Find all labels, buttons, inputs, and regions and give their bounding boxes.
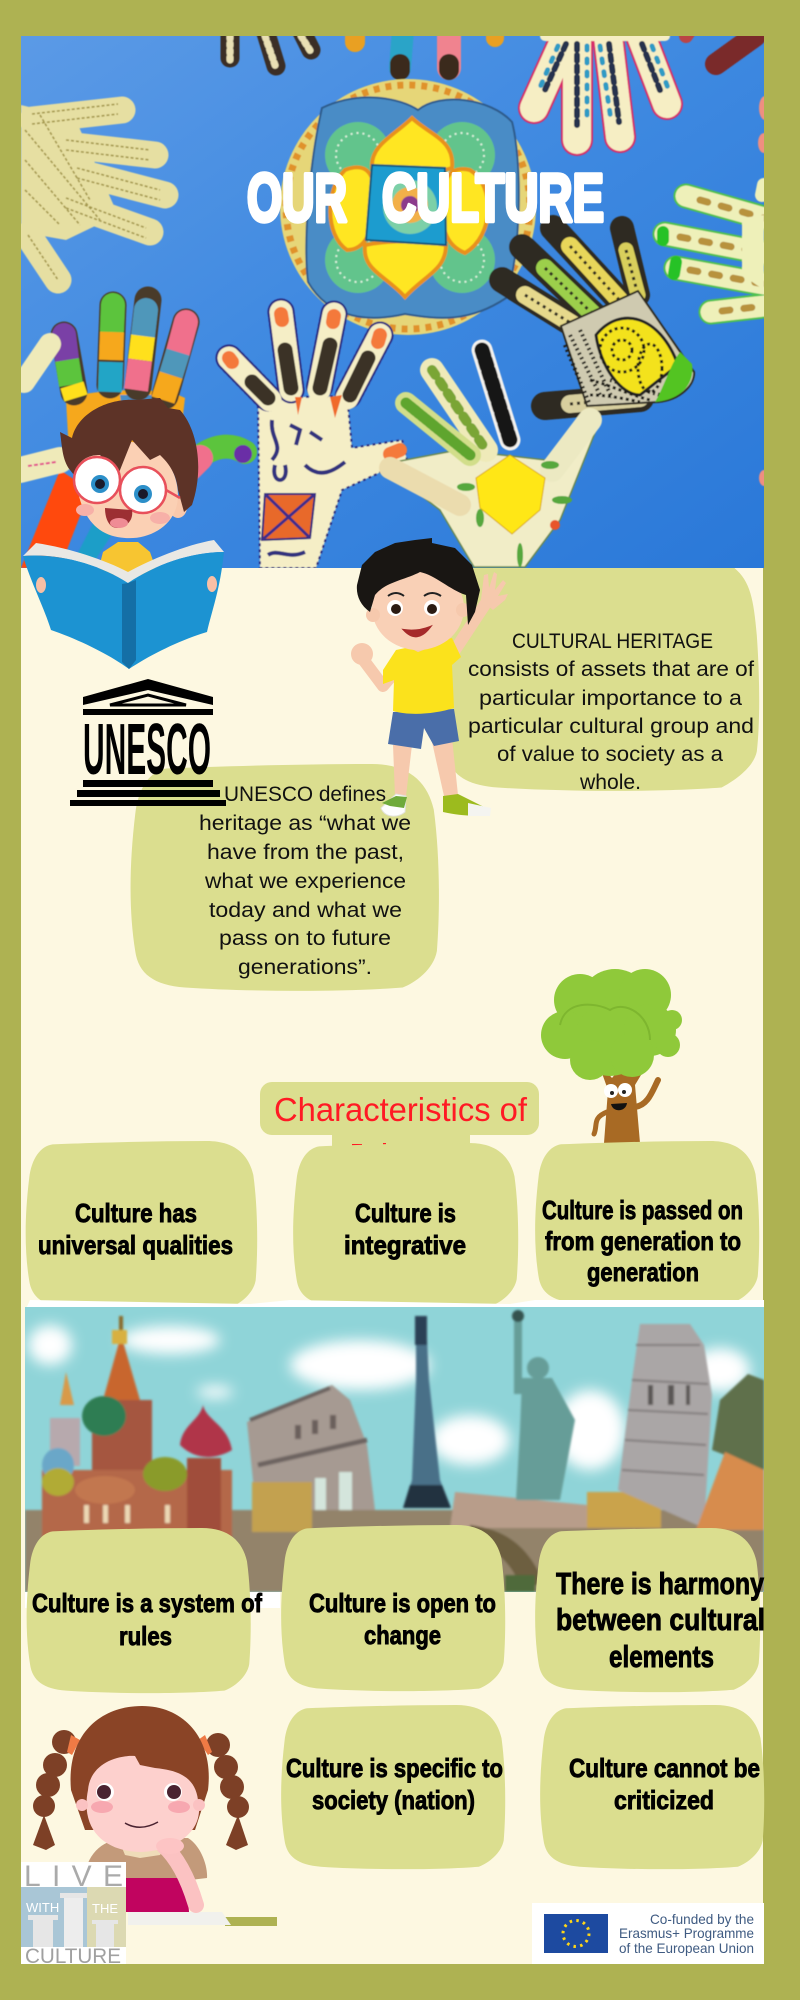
- braids: [33, 1730, 249, 1850]
- logo columns: [28, 1893, 118, 1947]
- logo: UNESCO temple: [70, 679, 226, 806]
- text: unesco definition: UNESCO defines: [224, 783, 386, 806]
- card: integrative: Culture is: [355, 1198, 456, 1228]
- legs: [393, 745, 412, 796]
- yellow building: [587, 1492, 661, 1528]
- photo: world monuments: [25, 1300, 764, 1608]
- logo: EU co-funded: [532, 1903, 764, 1964]
- card: unesco definition: [131, 764, 439, 991]
- orange pyramid: [696, 1452, 764, 1530]
- EU text: [619, 1911, 754, 1956]
- shorts: [388, 709, 459, 749]
- foreground ground band: [25, 1510, 764, 1592]
- mandala: [280, 79, 536, 335]
- character: tree: [541, 969, 682, 1143]
- eyes and mouth: [387, 593, 441, 636]
- boy hair: [60, 398, 198, 512]
- text: cultural heritage: whole.: [579, 771, 641, 794]
- text: unesco definition: [199, 783, 411, 979]
- title: OUR: [247, 160, 347, 236]
- arm: [163, 1845, 196, 1905]
- tree arms: [635, 1080, 658, 1107]
- card: specific to society: [281, 1705, 505, 1869]
- text: unesco definition: today and what we: [209, 899, 402, 922]
- hand: green right edge: [663, 185, 764, 312]
- card: universal qualities: [26, 1141, 257, 1310]
- open blue book: [23, 552, 224, 669]
- hand: colourful left: [20, 300, 252, 568]
- logo word CULTURE: CULTURE: [25, 1945, 121, 1968]
- yellow shirt: [383, 638, 461, 714]
- logo: live with the culture: [21, 1860, 126, 1968]
- card: passed on: generation: [587, 1257, 699, 1287]
- card: specific to society: Culture is specific to: [286, 1753, 503, 1783]
- eyes and cheeks: [91, 1783, 190, 1827]
- hero photo: painted hands on blue: [20, 28, 771, 568]
- card: system of rules: Culture is a system of: [32, 1588, 262, 1618]
- card: open to change: change: [364, 1620, 441, 1650]
- card: integrative: [293, 1143, 518, 1308]
- card: universal qualities: universal qualities: [38, 1230, 233, 1260]
- ancient wall: [450, 1492, 587, 1528]
- heading: characteristics of culture: [260, 1082, 539, 1160]
- hair back: [71, 1706, 209, 1830]
- character: boy waving in yellow shirt: [351, 538, 508, 816]
- statue of liberty: [512, 1310, 575, 1500]
- hand: yellow web: [388, 350, 600, 567]
- rocky mountain: [712, 1374, 764, 1470]
- hand: cream pattern left: [21, 104, 165, 280]
- text: cultural heritage: of value to society as a: [497, 743, 723, 766]
- boy glasses: [74, 457, 180, 513]
- card: open to change: Culture is open to: [309, 1588, 496, 1618]
- shoes: [381, 794, 406, 816]
- neck and face: [406, 630, 434, 652]
- text: cultural heritage: particular importance to a: [479, 687, 742, 710]
- text: unesco definition: what we experience: [204, 870, 406, 893]
- boy shirt: [97, 542, 158, 575]
- EU text: of the European Union: [619, 1940, 754, 1956]
- eiffel tower: [403, 1316, 451, 1508]
- text: unesco definition: generations”.: [238, 956, 372, 979]
- book and olive bar: [225, 1917, 277, 1926]
- card: cannot be criticized: [540, 1705, 764, 1869]
- card: harmony: [535, 1528, 765, 1692]
- character: thinking girl: [33, 1706, 277, 1926]
- hand on chin: [156, 1838, 184, 1854]
- boy cheeks and mouth: [76, 504, 94, 516]
- infographic canvas: UNESCO: [83, 710, 211, 790]
- right arm and waving hand: [455, 600, 488, 650]
- character: boy reading book: [23, 398, 224, 669]
- tree crown: [541, 969, 682, 1080]
- hand: white dotted centre: [229, 312, 407, 568]
- heading: characteristics of culture: Characteristics of: [274, 1091, 528, 1128]
- card: passed on: from generation to: [545, 1226, 741, 1256]
- card: passed on: [535, 1141, 759, 1305]
- logo words WITH THE: WITH: [26, 1900, 59, 1915]
- text: cultural heritage: particular cultural group and: [468, 715, 754, 738]
- tree trunk and branches: [598, 1060, 650, 1143]
- fingers along top edge: [230, 30, 755, 70]
- right edge fragments: [758, 96, 771, 486]
- text: cultural heritage: CULTURAL HERITAGE: [512, 630, 713, 653]
- card: harmony: elements: [609, 1639, 714, 1674]
- open book pages: [23, 540, 224, 583]
- hand: black henna right: [502, 228, 694, 406]
- card: passed on: Culture is passed on: [542, 1195, 743, 1225]
- card: cannot be criticized: Culture cannot be: [569, 1753, 760, 1783]
- text: unesco definition: have from the past,: [207, 841, 404, 864]
- pinafore: [125, 1870, 189, 1912]
- EU text: Erasmus+ Programme: [619, 1925, 754, 1941]
- title: CULTURE: [382, 160, 604, 236]
- card: universal qualities: Culture has: [75, 1198, 197, 1228]
- black hair: [357, 538, 480, 625]
- card: system of rules: [27, 1528, 262, 1693]
- card: cultural heritage: [442, 568, 759, 791]
- card: system of rules: rules: [119, 1621, 172, 1651]
- card: specific to society: society (nation): [312, 1785, 475, 1815]
- hand: pink outlined top right: [534, 28, 668, 140]
- EU text: Co-funded by the: [650, 1911, 754, 1927]
- card: integrative: integrative: [344, 1230, 466, 1260]
- boy face: [75, 442, 178, 538]
- title: [247, 160, 604, 236]
- plaid shirt: [84, 1838, 207, 1880]
- card: cannot be criticized: criticized: [614, 1785, 714, 1815]
- text: cultural heritage: consists of assets that are of: [468, 658, 754, 681]
- text: unesco definition: heritage as “what we: [199, 812, 411, 835]
- bridge: [470, 1525, 545, 1585]
- tree face: [604, 1083, 632, 1110]
- text: cultural heritage: [468, 630, 754, 794]
- EU flag: [544, 1914, 608, 1953]
- card: open to change: [281, 1525, 505, 1691]
- logo: live with the culture: THE: [92, 1901, 118, 1916]
- left arm and fist: [362, 658, 395, 686]
- text: unesco definition: pass on to future: [219, 927, 391, 950]
- st basil cathedral: [42, 1316, 232, 1540]
- face: [87, 1756, 199, 1852]
- card: harmony: between cultural: [556, 1602, 765, 1637]
- leaning tower of pisa: [618, 1324, 712, 1528]
- colosseum: [247, 1385, 375, 1532]
- boy hands: [36, 577, 46, 593]
- logo word LIVE: LIVE: [24, 1860, 123, 1893]
